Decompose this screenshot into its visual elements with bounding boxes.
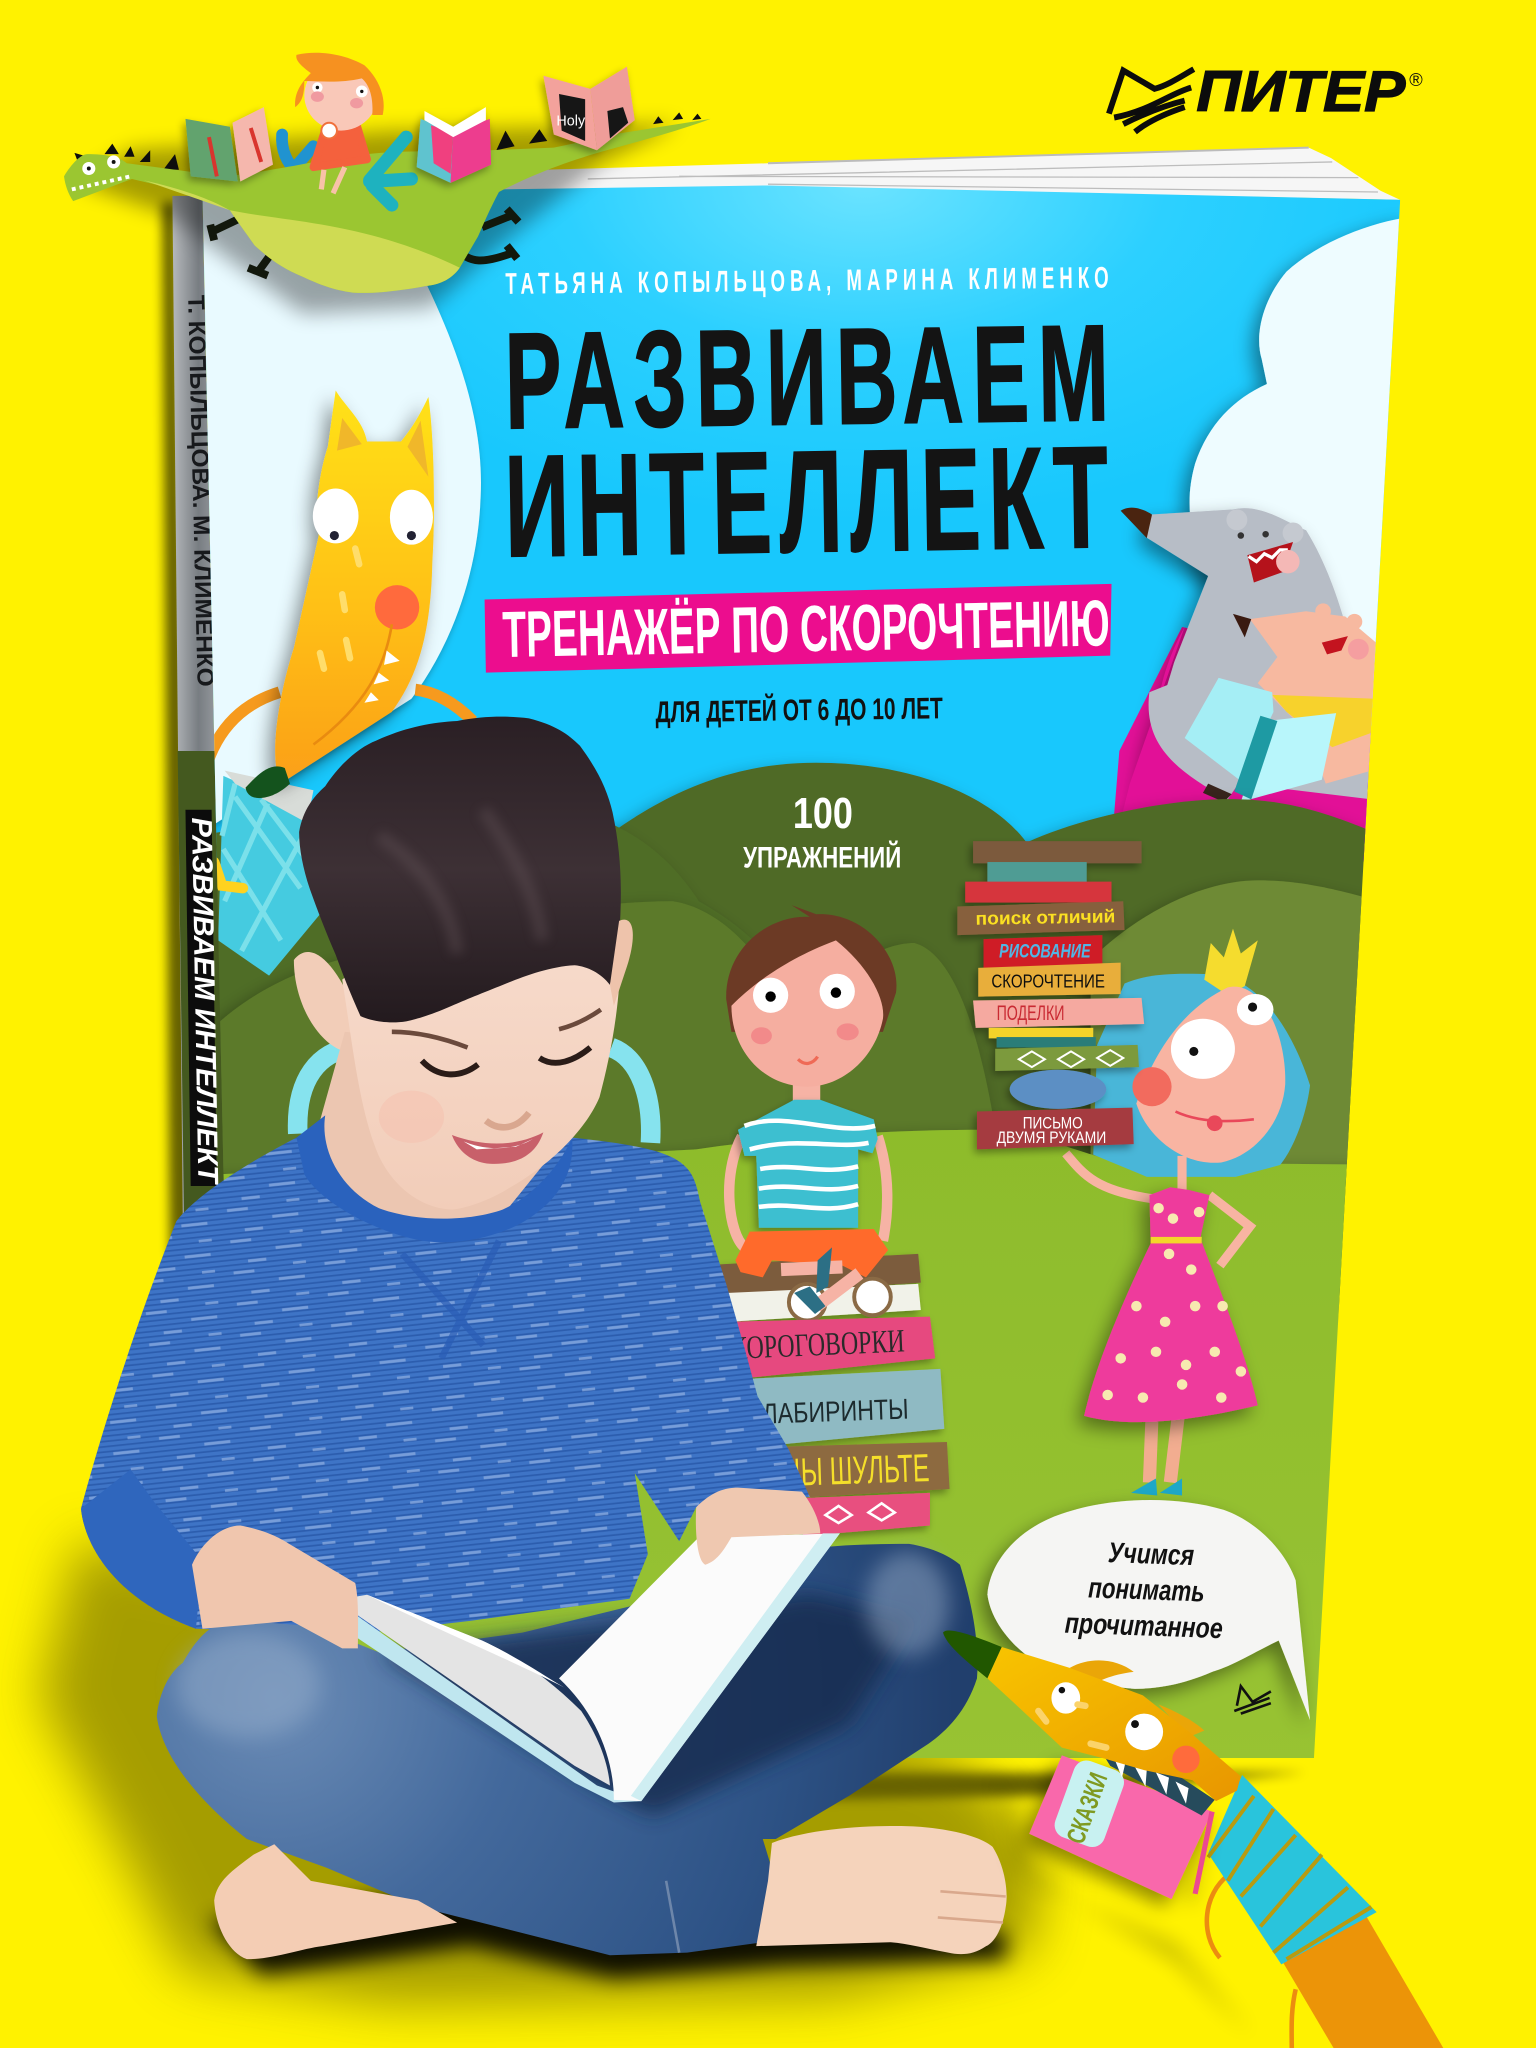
fox shadow [993, 1763, 1254, 2038]
exercises label: УПРАЖНЕНИЙ [743, 840, 901, 874]
page block [496, 148, 1400, 200]
fox cheek [375, 585, 419, 630]
fox cheek [1172, 1746, 1200, 1773]
grass [224, 1129, 1347, 1758]
yellow shorts [1272, 695, 1375, 747]
dragon eyes [82, 162, 95, 175]
striped sleeve [1208, 1775, 1377, 1964]
crown [1204, 929, 1258, 995]
big grey bear with small bear [1110, 508, 1384, 862]
little girl [295, 53, 384, 193]
strings [1207, 1876, 1296, 2048]
big fox with book [198, 391, 473, 976]
fox legs [298, 1048, 651, 1143]
dragon shadow [78, 124, 679, 313]
hill left [216, 824, 620, 910]
fox mouth [1104, 1755, 1215, 1816]
hill right [1078, 880, 1362, 1184]
exercise count: 100 [793, 790, 853, 838]
title line 1: РАЗВИВАЕМ [504, 297, 1110, 458]
subtitle bar: ТРЕНАЖЁР ПО СКОРОЧТЕНИЮ [502, 586, 1110, 671]
fox arms [214, 684, 477, 760]
bubble text: Учимся [1107, 1537, 1195, 1572]
fox nose [943, 1630, 1002, 1678]
boy with book [81, 717, 1007, 1959]
hills back [614, 758, 1366, 1318]
bottom fox with book [943, 1630, 1443, 2048]
open book in hands [285, 1533, 840, 1802]
label: skorochtenie: СКОРОЧТЕНИЕ [991, 970, 1105, 991]
collar [296, 1115, 572, 1242]
book label: shulte: ТАБЛИЦЫ ШУЛЬТЕ [700, 1447, 930, 1498]
small blue wing [282, 135, 313, 170]
legs [781, 1267, 859, 1306]
cover title texts [485, 261, 1112, 874]
boy book stack [700, 1254, 950, 1536]
label: podelki: ПОДЕЛКИ [997, 1002, 1064, 1025]
legs [210, 209, 519, 276]
small publisher mark [1234, 1686, 1271, 1714]
hair [295, 53, 384, 115]
logo wordmark: ПИТЕР [1196, 60, 1406, 124]
shorts [735, 1229, 888, 1277]
cover artwork [196, 183, 1424, 1776]
book label: labirinty: ЛАБИРИНТЫ [762, 1394, 909, 1431]
speech bubble: прочитанное [1064, 1608, 1223, 1645]
left hand [192, 1526, 358, 1648]
shoes [1131, 1479, 1157, 1496]
arms [729, 1136, 887, 1247]
logo icon [1109, 69, 1194, 132]
book label: skorogovorki: СКОРОГОВОРКИ [715, 1323, 905, 1368]
right pages [559, 1533, 840, 1801]
cartoon girl [1066, 929, 1310, 1496]
neck [793, 1071, 820, 1110]
head [731, 940, 883, 1087]
subtitle bar [485, 584, 1112, 673]
hill mid left [220, 902, 792, 1174]
label: poisk otlichiy: поиск отличий [975, 905, 1115, 929]
hair [299, 717, 621, 1022]
ground shadow of the boy [39, 1541, 1045, 2005]
left foot [214, 1844, 457, 1959]
spine authors: Т. КОПЫЛЬЦОВА. М. КЛИМЕНКО [183, 295, 219, 687]
fox snout [246, 766, 290, 798]
fox head [987, 1647, 1241, 1801]
brows and lashes [392, 1010, 601, 1048]
small pink bear [1250, 611, 1381, 784]
speech bubble: понимать [1088, 1572, 1205, 1608]
right foot [756, 1826, 1007, 1954]
label: dvumya rukami: ДВУМЯ РУКАМИ [997, 1128, 1106, 1147]
left cover [285, 1590, 641, 1802]
ears [1070, 1660, 1204, 1737]
head [304, 60, 377, 131]
girl face [1136, 987, 1285, 1163]
authors: ТАТЬЯНА КОПЫЛЬЦОВА, МАРИНА КЛИМЕНКО [505, 261, 1109, 301]
little book 2 [417, 107, 491, 183]
face [342, 914, 620, 1209]
ear [294, 952, 358, 1051]
fox eyes [313, 488, 433, 545]
neck [307, 1032, 575, 1228]
speech bubble [987, 1500, 1310, 1720]
jeans shade [379, 1593, 914, 1816]
dragon body [64, 119, 711, 293]
cartoon boy [726, 905, 896, 1314]
little book 3 [543, 67, 635, 150]
left cloud [196, 183, 481, 836]
registered mark: ® [1409, 69, 1423, 90]
dress [1084, 1187, 1258, 1422]
striped shirt [738, 1100, 878, 1228]
hill centre [822, 943, 992, 1132]
book label: СКАЗКИ [1060, 1769, 1113, 1848]
little book 1 [185, 107, 273, 182]
right hand [696, 1488, 820, 1565]
age note: ДЛЯ ДЕТЕЙ ОТ 6 ДО 10 ЛЕТ [655, 691, 944, 729]
nose [486, 1113, 529, 1127]
right ear sliver [610, 920, 633, 1006]
book shadow [162, 202, 1306, 1802]
pink book [1029, 1755, 1212, 1899]
spine title: РАЗВИВАЕМ ИНТЕЛЛЕКТ [185, 817, 223, 1186]
open book [1185, 678, 1273, 781]
book title: Holy [556, 113, 586, 129]
sweater [81, 1138, 810, 1633]
dragon with girl and books [64, 53, 711, 313]
label: pismo: ПИСЬМО [1023, 1113, 1083, 1132]
dragon belly [144, 180, 460, 293]
lollipop [321, 123, 337, 138]
book label [1051, 1757, 1128, 1851]
girl legs [1149, 1417, 1178, 1482]
fox ear shading [337, 418, 428, 477]
jeans [157, 1544, 978, 1955]
spine [172, 196, 225, 1228]
girl hair [1093, 974, 1310, 1177]
hair [726, 905, 896, 1032]
fox checked book [214, 771, 320, 976]
left pages [336, 1595, 610, 1785]
fox eyes [1051, 1682, 1163, 1750]
spikes [74, 112, 701, 170]
publisher logo [1109, 60, 1423, 132]
teal wing [370, 137, 411, 205]
label: risovanie: РИСОВАНИЕ [999, 940, 1091, 962]
mouth [452, 1132, 543, 1164]
dress [313, 120, 367, 167]
right cloud [1190, 217, 1411, 836]
girl book stack [957, 841, 1144, 1149]
girl neck and arms [1066, 1153, 1250, 1266]
title line 2: ИНТЕЛЛЕКТ [503, 416, 1109, 588]
orange arm [1283, 1916, 1443, 2048]
